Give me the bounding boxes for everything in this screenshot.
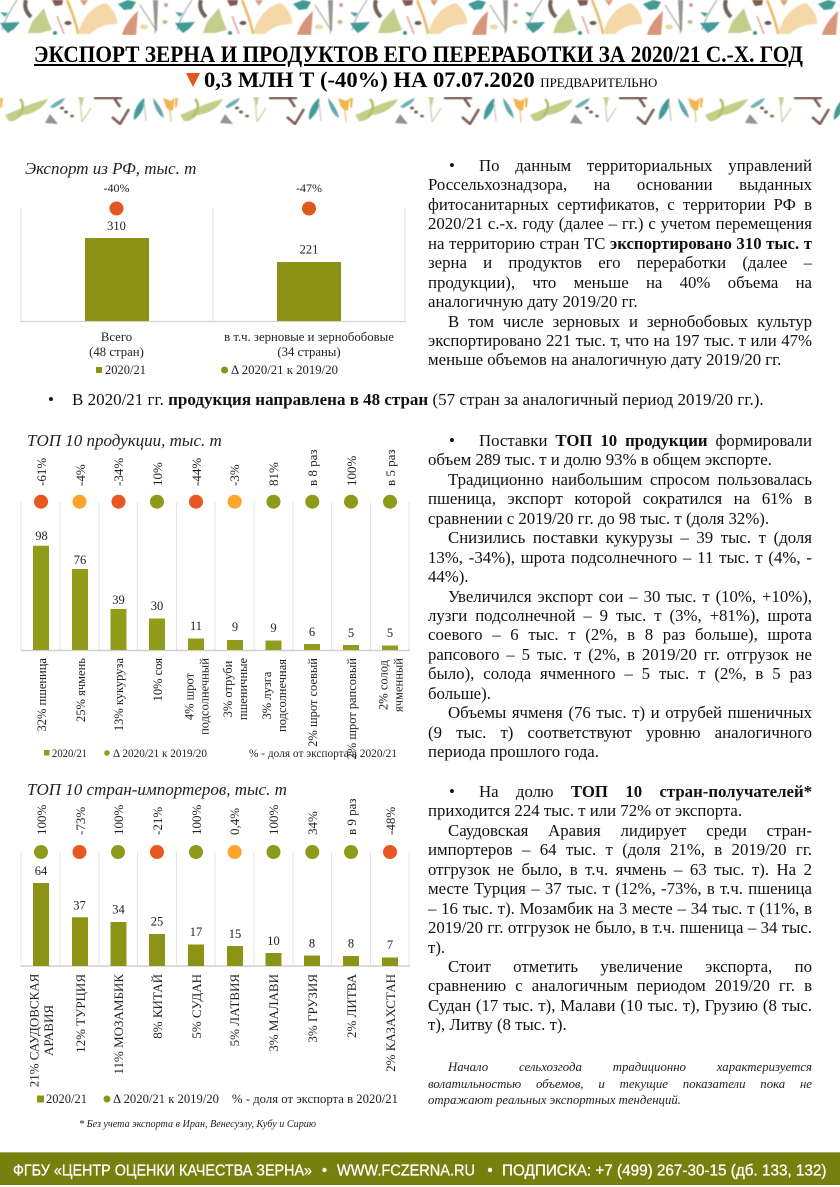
axis label: grains: в т.ч. зерновые и зернобобовые xyxy=(224,330,394,344)
bar: grains 221 xyxy=(277,242,341,321)
title: ЭКСПОРТ ЗЕРНА И ПРОДУКТОВ ЕГО ПЕРЕРАБОТКИ ЗА 2020/21 С.-Х. ГОД xyxy=(34,42,803,67)
text block: top 10 countries: т), Литву (8 тыс. т). xyxy=(428,1015,567,1034)
text block: top 10 products: Объемы ячменя (76 тыс. т) и отрубей пшеничных xyxy=(448,703,812,722)
text block: top 10 products: 44%). xyxy=(428,567,469,586)
category labels: 2% шрот рапсовый xyxy=(345,658,359,759)
footer band: ФГБУ «ЦЕНТР ОЦЕНКИ КАЧЕСТВА ЗЕРНА» xyxy=(13,1162,312,1180)
text block: top 10 countries: Саудовская Аравия лидирует среди стран- xyxy=(448,821,812,840)
change percentages: -48% xyxy=(383,807,398,835)
value labels: 11 xyxy=(190,619,202,633)
change percentages: 100% xyxy=(34,804,49,835)
change percentages: 34% xyxy=(305,811,320,835)
value labels: 9 xyxy=(232,620,238,634)
text block: top 10 countries xyxy=(428,782,812,1034)
value labels: 5 xyxy=(387,626,393,640)
text block: top 10 countries: приходится 224 тыс. т или 72% от экспорта. xyxy=(428,801,742,820)
category labels: 21% САУДОВСКАЯ xyxy=(26,973,42,1087)
category labels: 8% КИТАЙ xyxy=(150,974,165,1039)
axis label: grains: (34 страны) xyxy=(277,345,341,359)
value labels: 34 xyxy=(112,902,126,916)
text block: export summary: меньше объемов на аналогичную дату 2019/20 гг. xyxy=(428,350,781,369)
footer band: ПОДПИСКА: +7 (499) 267-30-15 (дб. 133, 132) xyxy=(502,1162,826,1180)
text block: export summary: Россельхознадзора, на основании выданных xyxy=(428,175,812,194)
value labels: 37 xyxy=(73,898,86,912)
category labels: 3% ГРУЗИЯ xyxy=(305,974,320,1043)
decorative floral band: bottom xyxy=(0,97,840,125)
change percentages xyxy=(34,798,398,835)
change markers xyxy=(34,845,397,859)
text block: top 10 products: 13%, -34%), шрота подсолнечного – 11 тыс. т (4%, - xyxy=(428,548,812,567)
footer band: WWW.FCZERNA.RU xyxy=(337,1162,475,1180)
text block: export summary: экспортировано 221 тыс. т, что на 197 тыс. т или 47% xyxy=(428,331,812,350)
chart heading: products: ТОП 10 продукции, тыс. т xyxy=(27,431,222,450)
text block: top 10 countries: импортеров – 64 тыс. т (доля 21%, в 2019/20 гг. xyxy=(428,840,812,859)
text block: top 10 countries: 2019/20 гг. отгрузок не было, в т.ч. пшеница – 34 тыс. xyxy=(428,918,812,937)
category labels: 3% отруби xyxy=(221,660,235,717)
text block: top 10 products: пшеница, экспорт которой сократился на 61% в xyxy=(428,489,812,508)
chart: top 10 products xyxy=(21,449,410,760)
axis label: total: Всего xyxy=(101,330,132,344)
text block: closing note: Начало сельхозгода традиционно характеризуется xyxy=(448,1060,812,1074)
bars xyxy=(33,546,398,650)
category labels: ячменный xyxy=(392,658,406,712)
text block: export summary: По данным территориальных управлений xyxy=(479,156,812,175)
footnote: * Без учета экспорта в Иран, Венесуэлу, Кубу и Сирию xyxy=(79,1119,316,1130)
bars xyxy=(33,883,398,966)
category labels: 3% МАЛАВИ xyxy=(266,974,281,1052)
change percentages: -34% xyxy=(111,458,126,486)
chart legend: 2020/21 xyxy=(52,746,87,760)
chart legend xyxy=(37,1091,398,1106)
value labels: 8 xyxy=(348,936,354,950)
footer band xyxy=(0,1152,840,1185)
change percentages: 0,4% xyxy=(227,808,242,835)
text block: export summary: В том числе зерновых и зернобобовых культур xyxy=(448,312,812,330)
change percentages: -44% xyxy=(189,458,204,486)
change percentages: в 9 раз xyxy=(344,798,359,835)
value labels: 9 xyxy=(270,621,277,635)
change percentages: -3% xyxy=(227,464,242,486)
text block: destinations bullet: • xyxy=(48,390,54,409)
category labels: 3% лузга xyxy=(260,671,274,719)
text block: top 10 products: (9 тыс. т) соответствуют уровню аналогичного xyxy=(428,723,812,742)
text block: top 10 countries: На долю ТОП 10 стран-получателей* xyxy=(479,782,812,801)
chart heading: countries: ТОП 10 стран-импортеров, тыс. т xyxy=(27,780,287,799)
text block: export summary: продукции), что меньше на 40% объема на xyxy=(428,273,812,292)
change percentages: в 8 раз xyxy=(305,449,320,486)
text block: top 10 countries: сравнению с аналогичным периодом 2019/20 гг. в xyxy=(428,976,812,995)
change marker: grains: -47% xyxy=(296,181,322,195)
value labels: 17 xyxy=(190,925,202,939)
chart legend: % - доля от экспорта в 2020/21 xyxy=(249,746,397,760)
text block: destinations bullet: В 2020/21 гг. продукция направлена в 48 стран (57 стран за аналогичный период 2019/20 гг.). xyxy=(72,390,764,409)
text block: top 10 products xyxy=(428,431,812,761)
value labels: 25 xyxy=(151,914,163,928)
change marker: grains xyxy=(296,181,322,216)
chart: export from Russia xyxy=(20,181,406,377)
text block: export summary: 2020/21 с.-х. году (далее – гг.) с учетом перемещения xyxy=(428,214,812,233)
text block: closing note xyxy=(428,1060,812,1107)
text block: top 10 products: Увеличился экспорт сои – 30 тыс. т (10%, +10%), xyxy=(448,586,812,606)
value labels xyxy=(35,864,393,952)
text block: export summary xyxy=(428,156,812,369)
chart legend: 2020/21 xyxy=(46,1091,87,1106)
text block: export summary: зерна и продуктов его переработки (далее – xyxy=(428,253,812,272)
category labels: АРАВИЯ xyxy=(41,1005,56,1056)
category labels: подсолнечная xyxy=(275,659,289,732)
text block: top 10 products: сравнении с 2019/20 гг. до 98 тыс. т (доля 32%). xyxy=(428,509,769,528)
category labels: 11% МОЗАМБИК xyxy=(111,974,126,1075)
category labels: 5% СУДАН xyxy=(189,974,204,1039)
text block: export summary: на территорию стран ТС экспортировано 310 тыс. т xyxy=(428,234,812,253)
value labels: 39 xyxy=(112,593,125,607)
text block: top 10 countries: отгрузок не было, в т.ч. ячмень – 63 тыс. т). На 2 xyxy=(428,860,812,879)
change percentages: 10% xyxy=(150,462,165,486)
chart legend: % - доля от экспорта в 2020/21 xyxy=(232,1091,398,1106)
subtitle: 0,3 МЛН Т (-40%) НА 07.07.2020 ПРЕДВАРИТЕЛЬНО xyxy=(204,67,657,92)
change percentages: в 5 раз xyxy=(383,449,398,486)
change percentages: -21% xyxy=(150,807,165,835)
change percentages: 100% xyxy=(189,804,204,835)
text block: top 10 products: Снизились поставки кукурузы – 39 тыс. т (доля xyxy=(448,528,812,547)
chart legend xyxy=(44,746,397,760)
bar: total 310 xyxy=(85,219,149,321)
chart legend: 2020/21 xyxy=(105,363,146,377)
chart heading: export: Экспорт из РФ, тыс. т xyxy=(25,159,196,178)
text block: top 10 products: Поставки ТОП 10 продукции формировали xyxy=(479,431,812,450)
text block: top 10 countries: т). xyxy=(428,938,445,956)
category labels: 10% соя xyxy=(151,658,165,701)
text block: top 10 countries: Судан (17 тыс. т), Малави (10 тыс. т), Грузию (8 тыс. xyxy=(428,996,812,1015)
text block: closing note: отражают реальных экспортных тенденций. xyxy=(428,1093,681,1107)
text block: top 10 products: Традиционно наибольшим спросом пользовалась xyxy=(448,470,812,489)
value labels: 30 xyxy=(151,599,163,613)
category labels: 25% ячмень xyxy=(74,658,88,722)
text block: top 10 countries: месте Турция – 37 тыс. т (12%, -73%, в т.ч. пшеница xyxy=(428,879,812,898)
text block: top 10 countries: Стоит отметить увеличение экспорта, по xyxy=(448,957,812,976)
change percentages: 100% xyxy=(266,804,281,835)
change percentages: 100% xyxy=(344,456,359,486)
chart legend xyxy=(96,363,338,377)
text block: top 10 products: лузги подсолнечной – 9 тыс. т (3%, +81%), шрота xyxy=(428,606,812,625)
value labels: 8 xyxy=(309,936,315,950)
category labels: 12% ТУРЦИЯ xyxy=(73,974,88,1053)
icon: down triangle xyxy=(186,73,200,87)
change marker: total: -40% xyxy=(104,181,130,195)
category labels xyxy=(35,657,406,759)
text block: top 10 products: соевого – 6 тыс. т (2%, в 8 раз больше), шрота xyxy=(428,625,812,644)
bar: grains 221: 221 xyxy=(300,242,318,256)
text block: top 10 products: объем 289 тыс. т и долю 93% в общем экспорте. xyxy=(428,450,772,469)
category labels: 2% шрот соевый xyxy=(306,658,320,747)
change percentages: 81% xyxy=(266,462,281,486)
value labels: 10 xyxy=(267,934,280,948)
chart legend: Δ 2020/21 к 2019/20 xyxy=(231,363,338,377)
value labels: 76 xyxy=(74,553,86,567)
category labels: 13% кукуруза xyxy=(112,658,126,731)
category labels xyxy=(26,973,398,1087)
value labels: 64 xyxy=(35,864,48,878)
text block: closing note: волатильностью объемов, и текущие показатели пока не xyxy=(428,1076,812,1090)
axis label: total: (48 стран) xyxy=(89,345,144,359)
text block: top 10 products: было), солода ячменного – 5 тыс. т (2%, в 5 раз xyxy=(428,664,812,683)
value labels: 5 xyxy=(348,626,354,640)
bar: total 310: 310 xyxy=(107,219,126,233)
category labels: 5% ЛАТВИЯ xyxy=(227,974,242,1046)
value labels: 7 xyxy=(387,938,393,952)
change percentages: -61% xyxy=(34,458,49,486)
text block: top 10 countries: – 16 тыс. т). Мозамбик на 3 месте – 34 тыс. т (11%, в xyxy=(428,899,812,918)
text block: top 10 products: рапсового – 5 тыс. т (2%, в 2019/20 гг. отгрузок не xyxy=(428,645,812,664)
text block: top 10 products: периода прошлого года. xyxy=(428,742,599,761)
text block: export summary: фитосанитарных сертификатов, с территории РФ в xyxy=(428,195,812,214)
change percentages: -4% xyxy=(73,464,88,486)
chart: top 10 importers xyxy=(21,798,410,1106)
value labels xyxy=(35,529,393,640)
value labels: 6 xyxy=(309,625,315,639)
chart legend: Δ 2020/21 к 2019/20 xyxy=(113,1091,219,1106)
change marker: total xyxy=(104,181,130,216)
category labels: 2% КАЗАХСТАН xyxy=(383,974,398,1072)
change percentages: -73% xyxy=(73,807,88,835)
change markers xyxy=(34,495,397,509)
value labels: 15 xyxy=(229,927,241,941)
category labels: подсолнечный xyxy=(198,658,212,735)
chart legend: Δ 2020/21 к 2019/20 xyxy=(113,746,207,760)
text block: export summary: аналогичную дату 2019/20 гг. xyxy=(428,292,638,311)
value labels: 98 xyxy=(35,529,48,543)
category labels: 4% шрот xyxy=(182,672,196,720)
category labels: пшеничные xyxy=(236,657,250,720)
category labels: 32% пшеница xyxy=(35,658,49,732)
category labels: 2% ЛИТВА xyxy=(344,973,359,1038)
change percentages: 100% xyxy=(111,804,126,835)
change percentages xyxy=(34,449,398,486)
category labels: 2% солод xyxy=(376,659,390,710)
text block: top 10 products: больше). xyxy=(428,684,491,703)
decorative floral band: top xyxy=(0,0,840,35)
